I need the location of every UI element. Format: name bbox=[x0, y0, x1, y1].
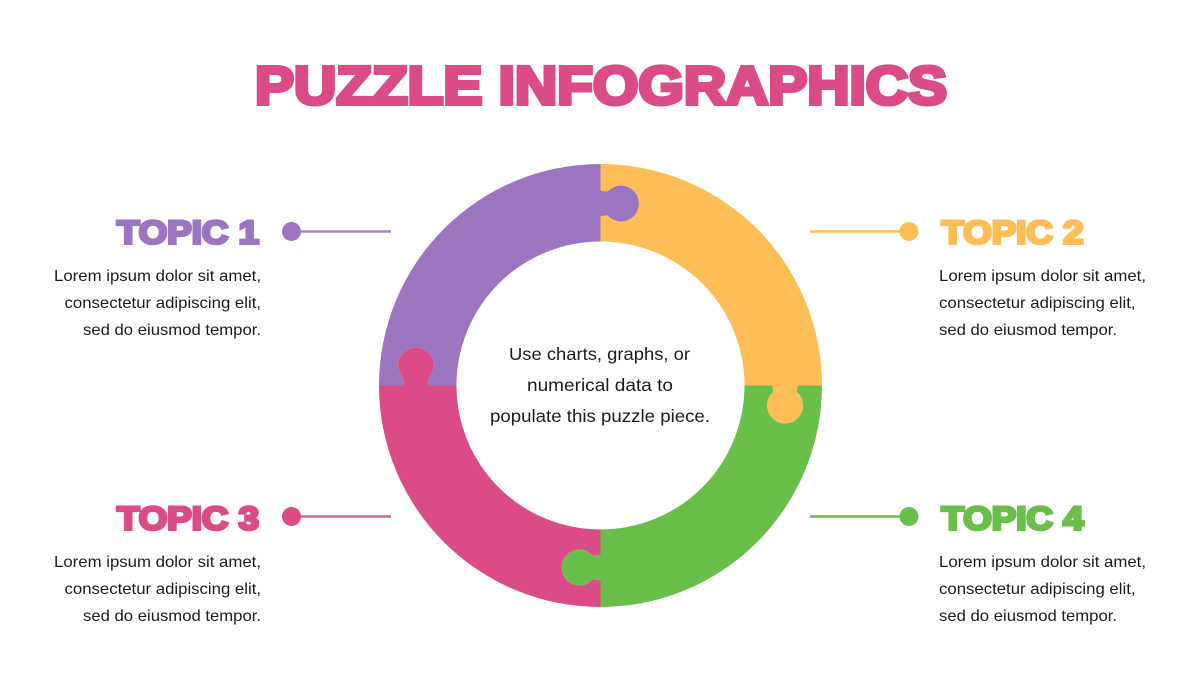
text: topic 3 bbox=[54, 554, 261, 625]
text: topic 2: sed do eiusmod tempor. bbox=[939, 322, 1117, 339]
center text: numerical data to bbox=[527, 375, 673, 395]
puzzle ring bbox=[379, 164, 822, 607]
heading: topic 1: TOPIC 1 bbox=[117, 214, 259, 250]
puzzle piece: orange bbox=[600, 164, 822, 424]
puzzle piece: pink bbox=[379, 347, 600, 607]
connector: topic 3 bbox=[282, 507, 391, 526]
text: topic 1: consectetur adipiscing elit, bbox=[64, 295, 261, 312]
puzzle piece: purple bbox=[379, 164, 639, 386]
center text: populate this puzzle piece. bbox=[490, 406, 710, 426]
topic 4 bbox=[810, 500, 1146, 625]
connector: topic 2 bbox=[810, 222, 918, 241]
text: topic 3: sed do eiusmod tempor. bbox=[83, 608, 261, 625]
text: topic 4 bbox=[939, 554, 1146, 625]
text: topic 1 bbox=[54, 268, 261, 339]
text: topic 4: Lorem ipsum dolor sit amet, bbox=[939, 554, 1146, 571]
connector: topic 1 bbox=[282, 222, 391, 241]
connector: topic 4 bbox=[810, 507, 918, 526]
topic 1 bbox=[54, 214, 391, 339]
text: topic 3: consectetur adipiscing elit, bbox=[64, 581, 261, 598]
topic 2 bbox=[810, 214, 1146, 339]
text: topic 3: Lorem ipsum dolor sit amet, bbox=[54, 554, 261, 571]
text: topic 4: sed do eiusmod tempor. bbox=[939, 608, 1117, 625]
heading: topic 3: TOPIC 3 bbox=[117, 500, 259, 536]
text: topic 2 bbox=[939, 268, 1146, 339]
title: PUZZLE INFOGRAPHICS bbox=[255, 57, 947, 116]
topic 3 bbox=[54, 500, 391, 625]
text: topic 1: sed do eiusmod tempor. bbox=[83, 322, 261, 339]
text: topic 4: consectetur adipiscing elit, bbox=[939, 581, 1136, 598]
text: topic 1: Lorem ipsum dolor sit amet, bbox=[54, 268, 261, 285]
text: topic 2: consectetur adipiscing elit, bbox=[939, 295, 1136, 312]
text: topic 2: Lorem ipsum dolor sit amet, bbox=[939, 268, 1146, 285]
center text bbox=[490, 344, 710, 426]
center text: Use charts, graphs, or bbox=[509, 344, 690, 364]
heading: topic 2: TOPIC 2 bbox=[942, 214, 1084, 250]
puzzle piece: green bbox=[561, 386, 822, 607]
heading: topic 4: TOPIC 4 bbox=[942, 500, 1084, 536]
